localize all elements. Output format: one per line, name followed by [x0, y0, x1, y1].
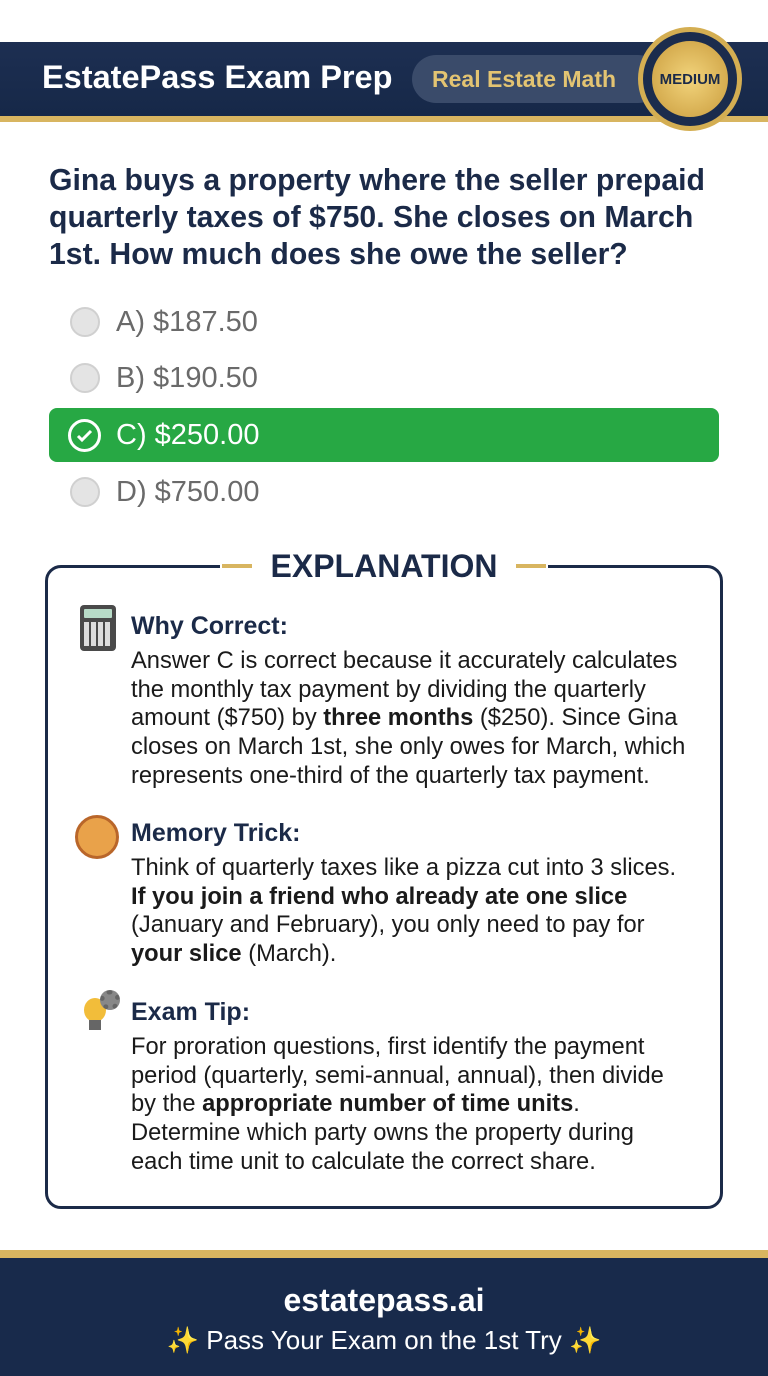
exam tip heading: Exam Tip: [131, 998, 250, 1026]
icon: calculator [80, 605, 116, 651]
footer url: estatepass.ai [283, 1282, 484, 1318]
memory trick body: (January and February), you only need to pay for [131, 912, 645, 938]
memory trick body [131, 855, 676, 967]
why correct body: closes on March 1st, she only owes for March, which [131, 734, 685, 760]
question: quarterly taxes of $750. She closes on March [49, 201, 693, 234]
footer [0, 1250, 768, 1376]
explanation heading: EXPLANATION [271, 548, 497, 584]
category pill [412, 55, 662, 103]
option A: A) $187.50 [116, 306, 258, 338]
option C correct [49, 408, 719, 462]
question: 1st. How much does she owe the seller? [49, 238, 628, 271]
exam tip body: For proration questions, first identify the payment [131, 1034, 644, 1060]
question [49, 164, 705, 271]
explanation heading [220, 545, 548, 587]
why correct body: represents one-third of the quarterly tax payment. [131, 763, 650, 789]
explanation panel [45, 565, 723, 1209]
exam tip body: by the appropriate number of time units. [131, 1091, 580, 1117]
exam tip body: Determine which party owns the property during [131, 1120, 634, 1146]
exam tip body: period (quarterly, semi-annual, annual), then divide [131, 1063, 664, 1089]
why correct heading: Why Correct: [131, 612, 288, 640]
option C correct: C) $250.00 [116, 419, 260, 451]
memory trick body: Think of quarterly taxes like a pizza cut into 3 slices. [131, 855, 676, 881]
memory trick heading: Memory Trick: [131, 819, 301, 847]
question: Gina buys a property where the seller prepaid [49, 164, 705, 197]
option B: B) $190.50 [116, 362, 258, 394]
why correct body: Answer C is correct because it accurately calculates [131, 648, 677, 674]
difficulty badge [638, 27, 742, 131]
footer tagline: ✨ Pass Your Exam on the 1st Try ✨ [167, 1325, 601, 1355]
memory trick body: your slice (March). [131, 941, 336, 967]
memory trick body: If you join a friend who already ate one slice [131, 884, 627, 910]
difficulty badge: MEDIUM [660, 71, 720, 88]
header title: EstatePass Exam Prep [42, 59, 392, 95]
category pill: Real Estate Math [432, 66, 616, 92]
header band [0, 42, 768, 122]
exam tip body: each time unit to calculate the correct share. [131, 1149, 596, 1175]
option D: D) $750.00 [116, 476, 260, 508]
icon: lightbulb gear [84, 990, 120, 1030]
why correct body [131, 648, 685, 789]
why correct body: the monthly tax payment by dividing the quarterly [131, 677, 646, 703]
icon: pizza [75, 815, 119, 859]
exam tip body [131, 1034, 664, 1175]
why correct body: amount ($750) by three months ($250). Since Gina [131, 705, 677, 731]
